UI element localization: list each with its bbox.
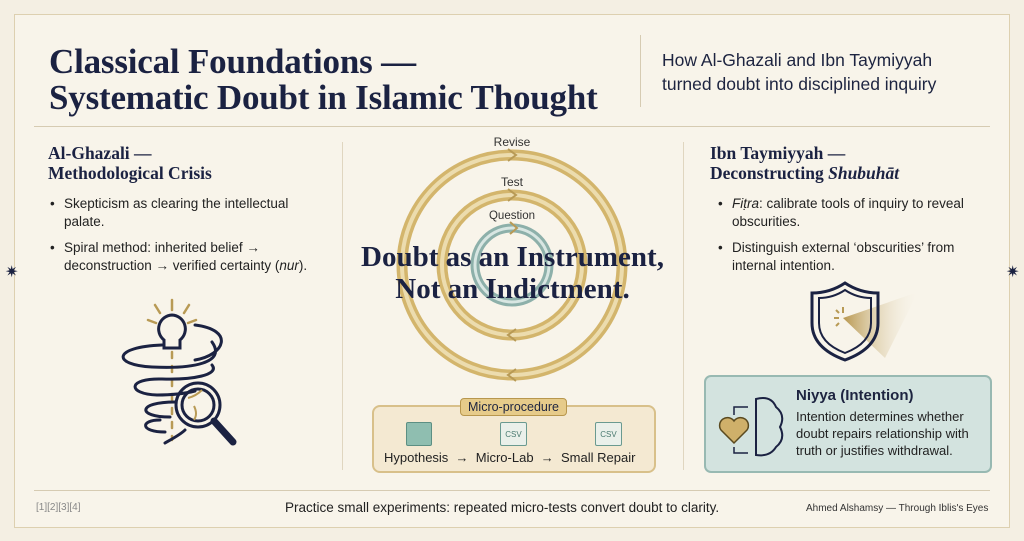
text: Niyya: doubt repairs relationship with xyxy=(796,426,969,441)
title xyxy=(49,42,598,117)
steps: Hypothesis → Micro-Lab → Small Repair xyxy=(384,450,635,465)
icon: heart and brain xyxy=(718,397,784,456)
icon: table xyxy=(406,422,432,446)
central statement: Doubt as an Instrument, xyxy=(361,241,664,273)
footer: credit: Ahmed Alshamsy — Through Iblis's Eyes xyxy=(806,503,988,514)
heading: Al-Ghazali: Methodological Crisis xyxy=(48,163,212,183)
title: Classical Foundations — xyxy=(49,42,416,81)
decoration: side stars: ✷ xyxy=(5,264,18,281)
bullets: Ibn Taymiyyah: Fiṭra: calibrate tools of inquiry to reveal obscurities. xyxy=(732,196,964,229)
subtitle xyxy=(662,50,936,94)
panel: micro-procedure xyxy=(372,405,656,473)
icon: spiral with lightbulb and magnifier xyxy=(122,298,236,446)
bullets: Al-Ghazali xyxy=(50,196,307,273)
heading: Ibn Taymiyyah: Ibn Taymiyyah — xyxy=(710,143,845,163)
icon: shield with light beam xyxy=(810,281,902,362)
panel: Ibn Taymiyyah xyxy=(710,143,964,273)
text: ✷ xyxy=(1006,264,1019,281)
heading: Niyya: Niyya (Intention) xyxy=(796,387,914,404)
text: Niyya xyxy=(796,409,969,458)
label: Test: Test xyxy=(501,175,524,189)
bullets: Al-Ghazali: Skepticism as clearing the intellectual palate. xyxy=(64,196,288,229)
panel: Al-Ghazali xyxy=(48,143,307,273)
heading: Al-Ghazali: Al-Ghazali — xyxy=(48,143,152,163)
heading: Al-Ghazali xyxy=(48,143,212,183)
title: Systematic Doubt in Islamic Thought xyxy=(49,78,598,117)
central statement: Not an Indictment. xyxy=(395,273,630,305)
label: Micro-procedure: Micro-procedure xyxy=(468,400,559,414)
bullets: Ibn Taymiyyah xyxy=(718,196,964,273)
heading: Ibn Taymiyyah: Deconstructing Shubuhāt xyxy=(710,163,899,183)
label: Revise: Revise xyxy=(494,135,531,149)
bullets: Ibn Taymiyyah: Distinguish external ‘obscurities’ from internal intention. xyxy=(732,240,954,273)
heading: Ibn Taymiyyah xyxy=(710,143,900,183)
icon: csv xyxy=(500,422,527,446)
bullets: Al-Ghazali: Spiral method: inherited belief → deconstruction → verified certainty (nur). xyxy=(64,240,307,273)
icon: csv xyxy=(595,422,622,446)
icon: csv: CSV xyxy=(505,430,522,439)
callout: Niyya xyxy=(704,375,992,473)
label: Question: Question xyxy=(489,210,535,222)
central statement xyxy=(361,241,664,305)
footer: references: [1][2][3][4] xyxy=(36,502,80,513)
text: Niyya: Intention determines whether xyxy=(796,409,964,424)
subtitle: How Al-Ghazali and Ibn Taymiyyah xyxy=(662,50,932,70)
chart: concentric cycle xyxy=(396,135,628,382)
label: Micro-procedure xyxy=(460,398,567,416)
text: Niyya: truth or justifies withdrawal. xyxy=(796,443,953,458)
icon: csv: CSV xyxy=(600,430,617,439)
subtitle: turned doubt into disciplined inquiry xyxy=(662,74,936,94)
footer: takeaway: Practice small experiments: repeated micro-tests convert doubt to clarity. xyxy=(285,500,719,515)
